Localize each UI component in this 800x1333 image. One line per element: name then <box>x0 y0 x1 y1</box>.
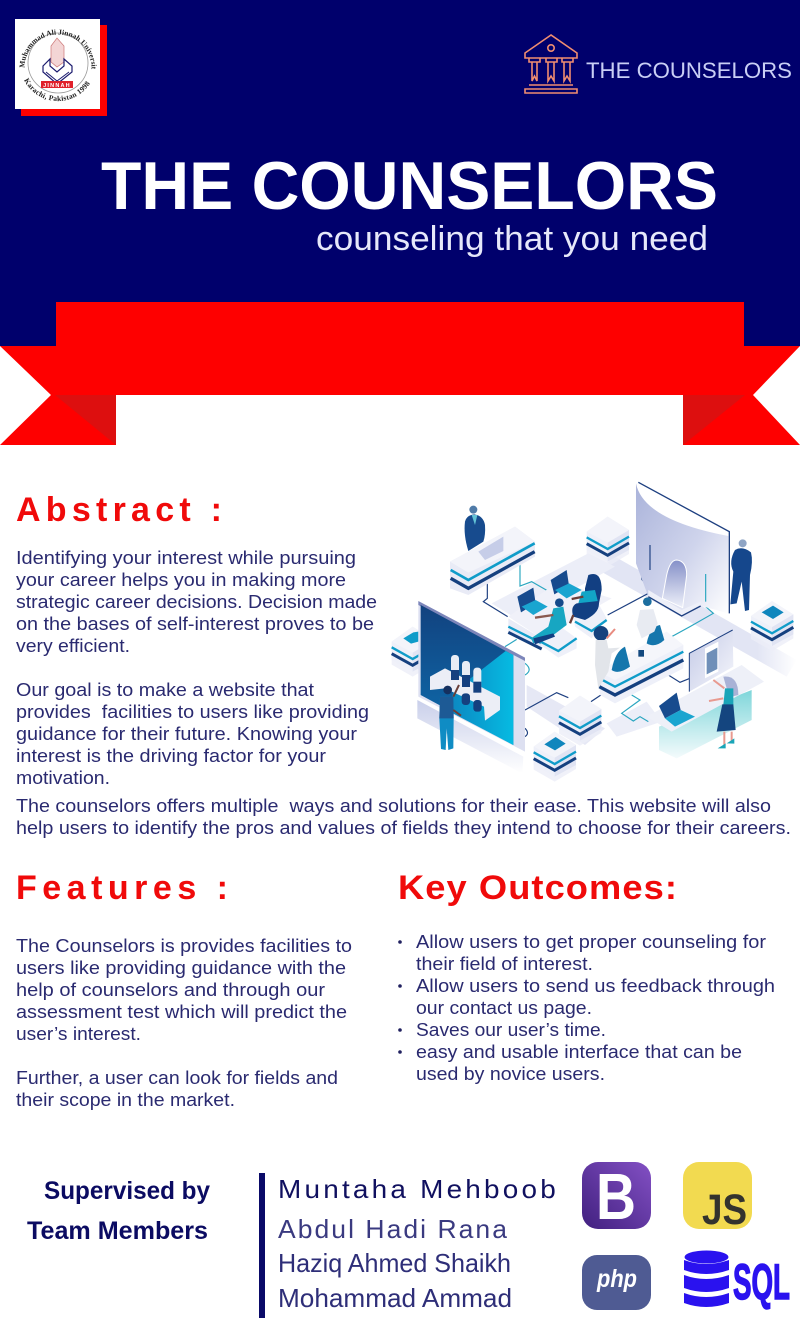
key outcomes list: Allow users to send us feedback through <box>416 975 775 996</box>
abstract text: on the bases of self-interest proves to be <box>16 613 374 634</box>
the counselors brand logo <box>525 35 792 93</box>
abstract text: strategic career decisions. Decision made <box>16 591 377 612</box>
icon: php: php <box>596 1265 637 1293</box>
key outcomes list <box>398 931 775 1084</box>
abstract text: interest is the driving factor for your <box>16 745 326 766</box>
lab bench <box>598 625 683 703</box>
supervisor and team labels: Supervised by <box>44 1177 210 1205</box>
features text <box>16 935 352 1110</box>
features text: user’s interest. <box>16 1023 141 1044</box>
seated people <box>531 574 602 644</box>
big monitor <box>636 482 729 616</box>
icon: courthouse <box>525 35 577 93</box>
floor paths <box>417 553 797 773</box>
title: THE COUNSELORS <box>101 148 718 224</box>
abstract heading: Abstract : <box>16 491 222 529</box>
abstract text: Identifying your interest while pursuing <box>16 547 356 568</box>
names: Haziq Ahmed Shaikh <box>278 1248 511 1278</box>
key outcomes list: our contact us page. <box>416 997 592 1018</box>
university logo: Karachi, Pakistan 1998 <box>24 78 90 102</box>
names: Mohammad Ammad <box>278 1283 512 1313</box>
icon: sql database <box>684 1250 790 1310</box>
icon: php <box>582 1255 651 1310</box>
lab table with laptops <box>508 570 612 658</box>
features text: The Counselors is provides facilities to <box>16 935 352 956</box>
abstract text: your career helps you in making more <box>16 569 346 590</box>
features heading: Features : <box>16 869 228 907</box>
university logo: JINNAH <box>43 83 71 89</box>
icon: bootstrap <box>582 1160 651 1233</box>
features text: Further, a user can look for fields and <box>16 1067 338 1088</box>
abstract text: motivation. <box>16 767 110 788</box>
divider bar <box>259 1173 265 1318</box>
scientists <box>594 597 658 688</box>
abstract text: very efficient. <box>16 635 130 656</box>
abstract text: guidance for their future. Knowing your <box>16 723 357 744</box>
key outcomes list: Saves our user’s time. <box>416 1019 606 1040</box>
abstract text: Our goal is to make a website that <box>16 679 314 700</box>
connector lines <box>483 545 713 737</box>
header panel <box>0 0 800 346</box>
man at desk <box>465 506 485 551</box>
subtitle: counseling that you need <box>316 220 708 258</box>
abstract text: help users to identify the pros and values of fields they intend to choose for their careers. <box>16 817 791 838</box>
key outcomes list: easy and usable interface that can be <box>416 1041 742 1062</box>
supervisor and team labels <box>27 1177 210 1245</box>
key outcomes list: their field of interest. <box>416 953 593 974</box>
names: Abdul Hadi Rana <box>278 1214 509 1244</box>
key outcomes heading: Key Outcomes: <box>398 869 678 907</box>
supervisor and team labels: Team Members <box>27 1217 208 1245</box>
icon: javascript <box>683 1162 752 1234</box>
abstract text: The counselors offers multiple ways and solutions for their ease. This website will also <box>16 795 771 816</box>
brand name: THE COUNSELORS <box>586 58 792 83</box>
blue test-tube screen <box>418 601 525 752</box>
reception desk <box>450 527 535 595</box>
university logo <box>15 19 107 116</box>
icon: javascript: JS <box>702 1186 747 1234</box>
isometric illustration <box>392 482 797 782</box>
reception with laptop and woman <box>647 630 764 758</box>
key outcomes list: used by novice users. <box>416 1063 605 1084</box>
features text: assessment test which will predict the <box>16 1001 347 1022</box>
man at monitor <box>730 539 752 611</box>
abstract text <box>16 547 791 838</box>
key outcomes list: Allow users to get proper counseling for <box>416 931 766 952</box>
man at screen <box>439 685 461 750</box>
names <box>278 1174 559 1313</box>
names: Muntaha Mehboob <box>278 1174 559 1204</box>
features text: users like providing guidance with the <box>16 957 346 978</box>
ribbon banner <box>0 302 800 445</box>
features text: help of counselors and through our <box>16 979 325 1000</box>
storage blocks <box>587 517 629 567</box>
features text: their scope in the market. <box>16 1089 235 1110</box>
icon: bootstrap: B <box>596 1160 636 1233</box>
abstract text: provides facilities to users like providing <box>16 701 369 722</box>
